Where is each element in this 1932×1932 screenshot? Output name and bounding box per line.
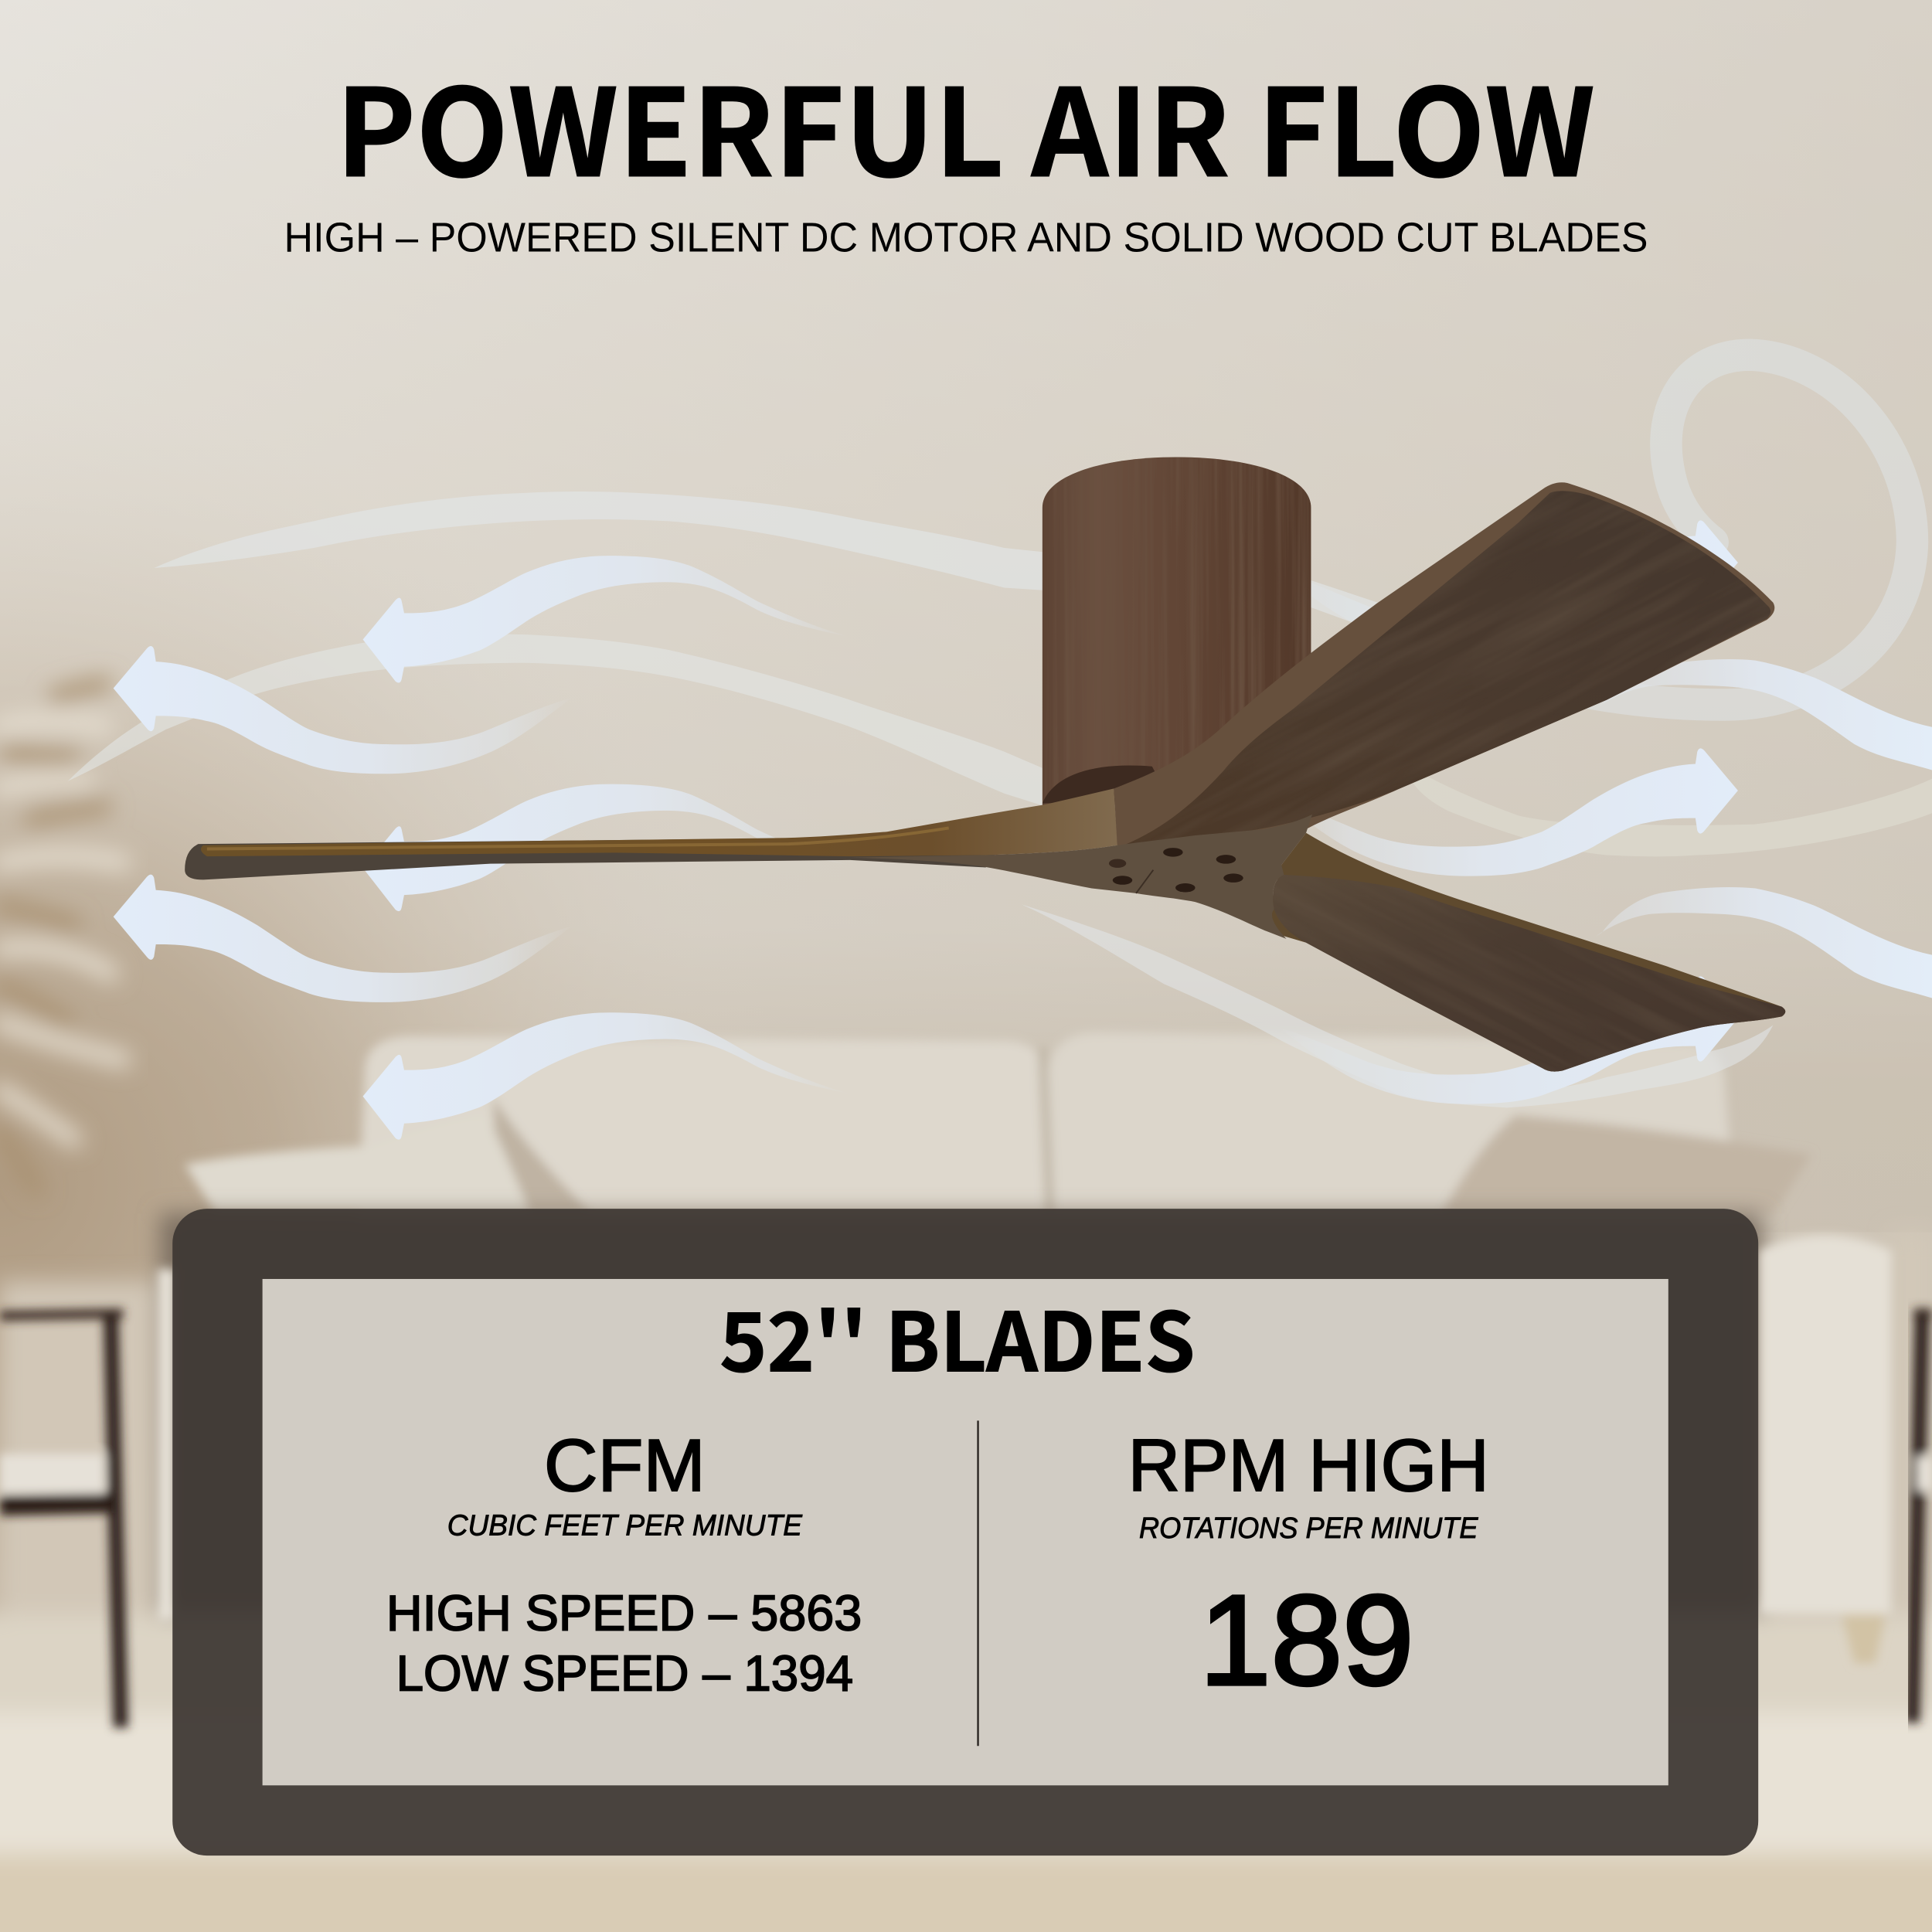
left armchair xyxy=(0,1314,123,1727)
arrow: center middle xyxy=(363,784,850,911)
subtitle: HIGH – POWERED SILENT DC MOTOR AND SOLID WOOD CUT BLADES xyxy=(284,214,1648,260)
heading: blade size: 52'' BLADES xyxy=(719,1278,1196,1396)
fan blade: lower right xyxy=(1264,833,1785,1072)
dark outer panel xyxy=(172,1209,1758,1855)
sofa back cushions xyxy=(185,1032,1811,1244)
wave: right upper running off page xyxy=(1596,659,1932,770)
swoosh: right loop xyxy=(1380,355,1912,705)
RPM description: ROTATIONS PER MINUTE xyxy=(1139,1512,1478,1545)
sofa arms xyxy=(158,1235,1891,1663)
low speed value: LOW SPEED – 1394 xyxy=(396,1645,853,1702)
arrow: left upper xyxy=(114,646,573,774)
arrow: right top xyxy=(1278,520,1738,648)
high speed value: HIGH SPEED – 5863 xyxy=(386,1584,862,1641)
airflow arrows behind fan xyxy=(114,520,1932,1140)
arrow: right bottom xyxy=(1278,976,1738,1104)
fan blade: left xyxy=(185,788,1117,879)
fan blade: upper right xyxy=(1114,482,1774,845)
RPM label: RPM HIGH xyxy=(1128,1424,1489,1507)
sofa body and floor xyxy=(0,1213,1932,1932)
arrow: center bottom xyxy=(363,1012,850,1140)
swoosh: lower band xyxy=(1022,904,1773,1107)
panel: specifications xyxy=(172,1209,1758,1855)
arrow: left lower xyxy=(114,875,573,1002)
swoosh: top long band xyxy=(154,492,1389,636)
title: POWERFUL AIR FLOW xyxy=(335,36,1595,211)
column: CFM xyxy=(386,1424,862,1702)
swoosh: second long band xyxy=(68,634,1047,807)
CFM description: CUBIC FEET PER MINUTE xyxy=(447,1509,802,1543)
arrow: right middle xyxy=(1278,748,1738,876)
dimmer right side of wall xyxy=(0,0,1932,1232)
swoosh: second band right end xyxy=(1405,764,1932,856)
column: RPM xyxy=(1128,1424,1489,1713)
light inner panel xyxy=(263,1279,1668,1785)
fan motor housing xyxy=(1043,457,1311,815)
warm shade on left wall xyxy=(0,394,813,1932)
divider line xyxy=(977,1420,979,1746)
CFM label: CFM xyxy=(544,1424,706,1507)
pampas grass decoration xyxy=(0,684,123,1189)
fan hub underside with screw holes xyxy=(850,815,1312,939)
arrow: center top xyxy=(363,556,850,682)
ceiling fan xyxy=(185,155,1932,1376)
right armchair xyxy=(1912,1314,1932,1723)
wave: right lower running off page xyxy=(1596,887,1932,998)
RPM value: 189 xyxy=(1199,1570,1414,1713)
translucent background air swooshes xyxy=(68,355,1932,1107)
